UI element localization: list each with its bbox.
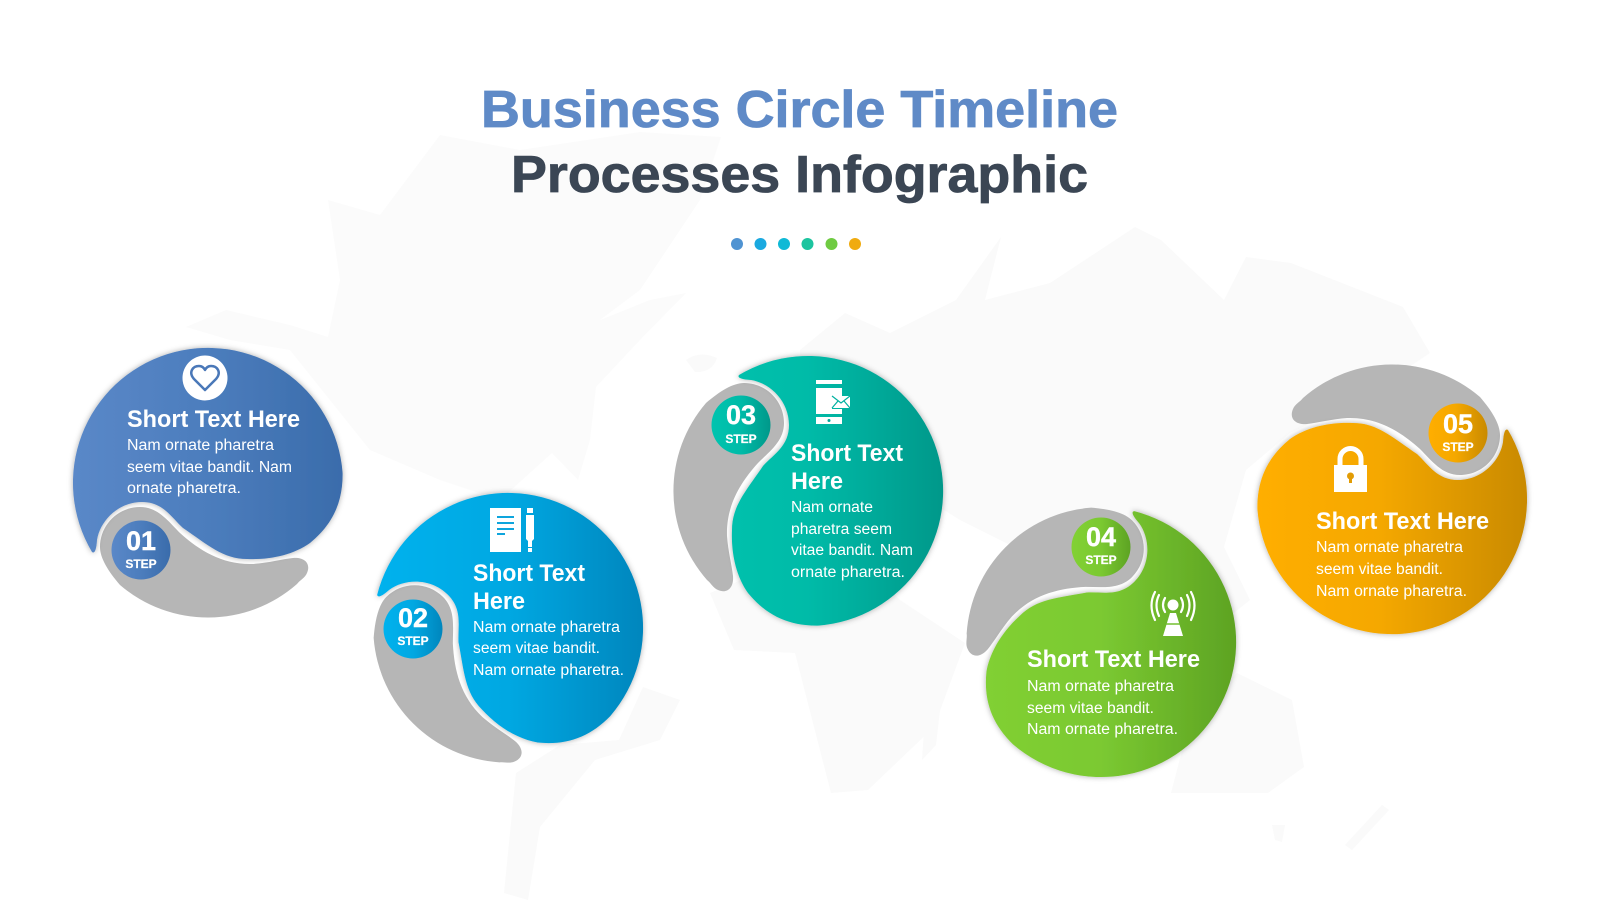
step badge 01: STEP: [125, 557, 157, 571]
text block 04: [1027, 646, 1200, 738]
text block 02: seem vitae bandit.: [473, 640, 600, 657]
text block 04: seem vitae bandit.: [1027, 700, 1154, 717]
text block 02: [473, 560, 624, 679]
grey tail 05: [1292, 364, 1500, 475]
step badge 04: STEP: [1085, 553, 1117, 567]
step badge 02: [384, 600, 442, 658]
icon: padlock: [1334, 448, 1367, 492]
colour blob 04: [952, 493, 1292, 833]
text block 03: Here: [791, 468, 843, 495]
text block 01: ornate pharetra.: [127, 480, 241, 497]
step badge 02: 02: [398, 603, 428, 633]
title: [481, 81, 1118, 204]
colour blob 01: [73, 348, 343, 559]
panel: step 04: [935, 470, 1292, 833]
step badge 03: 03: [726, 400, 756, 430]
icon: document and pen: [490, 508, 534, 552]
text block 05: seem vitae bandit.: [1316, 561, 1443, 578]
icon: phone with envelope: [816, 380, 850, 424]
step badge 04: [1072, 518, 1130, 576]
grey tail 02: [336, 569, 562, 794]
text block 01: Nam ornate pharetra: [127, 437, 274, 454]
panel: step 05: [1257, 364, 1527, 634]
background world map: [186, 132, 1430, 900]
title: Business Circle Timeline: [481, 81, 1118, 139]
step badge 01: [112, 520, 170, 580]
decorative dots row: [731, 238, 861, 250]
text block 02: Nam ornate pharetra.: [473, 662, 624, 679]
grey tail 04: [935, 470, 1160, 696]
step badge 03: STEP: [725, 432, 757, 446]
step badge 02: STEP: [397, 634, 429, 648]
text block 04: Nam ornate pharetra.: [1027, 721, 1178, 738]
text block 01: [127, 406, 300, 497]
title: Processes Infographic: [511, 146, 1088, 204]
text block 03: pharetra seem: [791, 521, 892, 538]
text block 04: Short Text Here: [1027, 646, 1200, 673]
panel: step 02: [336, 437, 699, 794]
step badge 03: [712, 396, 770, 454]
step badge 04: 04: [1086, 522, 1116, 552]
text block 03: [791, 440, 913, 581]
panel: step 03: [673, 356, 943, 626]
colour blob 02: [359, 437, 699, 777]
icon: antenna: [1152, 592, 1194, 636]
colour blob 03: [732, 356, 943, 626]
text block 02: Here: [473, 588, 525, 615]
text block 01: Short Text Here: [127, 406, 300, 433]
text block 01: seem vitae bandit. Nam: [127, 459, 292, 476]
text block 05: Nam ornate pharetra: [1316, 539, 1463, 556]
panel: step 01: [73, 348, 343, 618]
text block 02: Short Text: [473, 560, 585, 587]
text block 05: Nam ornate pharetra.: [1316, 583, 1467, 600]
text block 03: Short Text: [791, 440, 903, 467]
text block 02: Nam ornate pharetra: [473, 619, 620, 636]
text block 03: Nam ornate: [791, 499, 873, 516]
text block 05: [1316, 508, 1489, 600]
colour blob 05: [1257, 423, 1527, 634]
text block 04: Nam ornate pharetra: [1027, 678, 1174, 695]
step badge 05: 05: [1443, 409, 1473, 439]
step badge 05: [1428, 404, 1488, 462]
icon: heart: [182, 356, 228, 400]
text block 03: vitae bandit. Nam: [791, 542, 913, 559]
text block 05: Short Text Here: [1316, 508, 1489, 535]
step badge 01: 01: [126, 526, 156, 556]
text block 03: ornate pharetra.: [791, 564, 905, 581]
step badge 05: STEP: [1442, 440, 1474, 454]
grey tail 03: [673, 383, 784, 591]
grey tail 01: [100, 507, 308, 618]
